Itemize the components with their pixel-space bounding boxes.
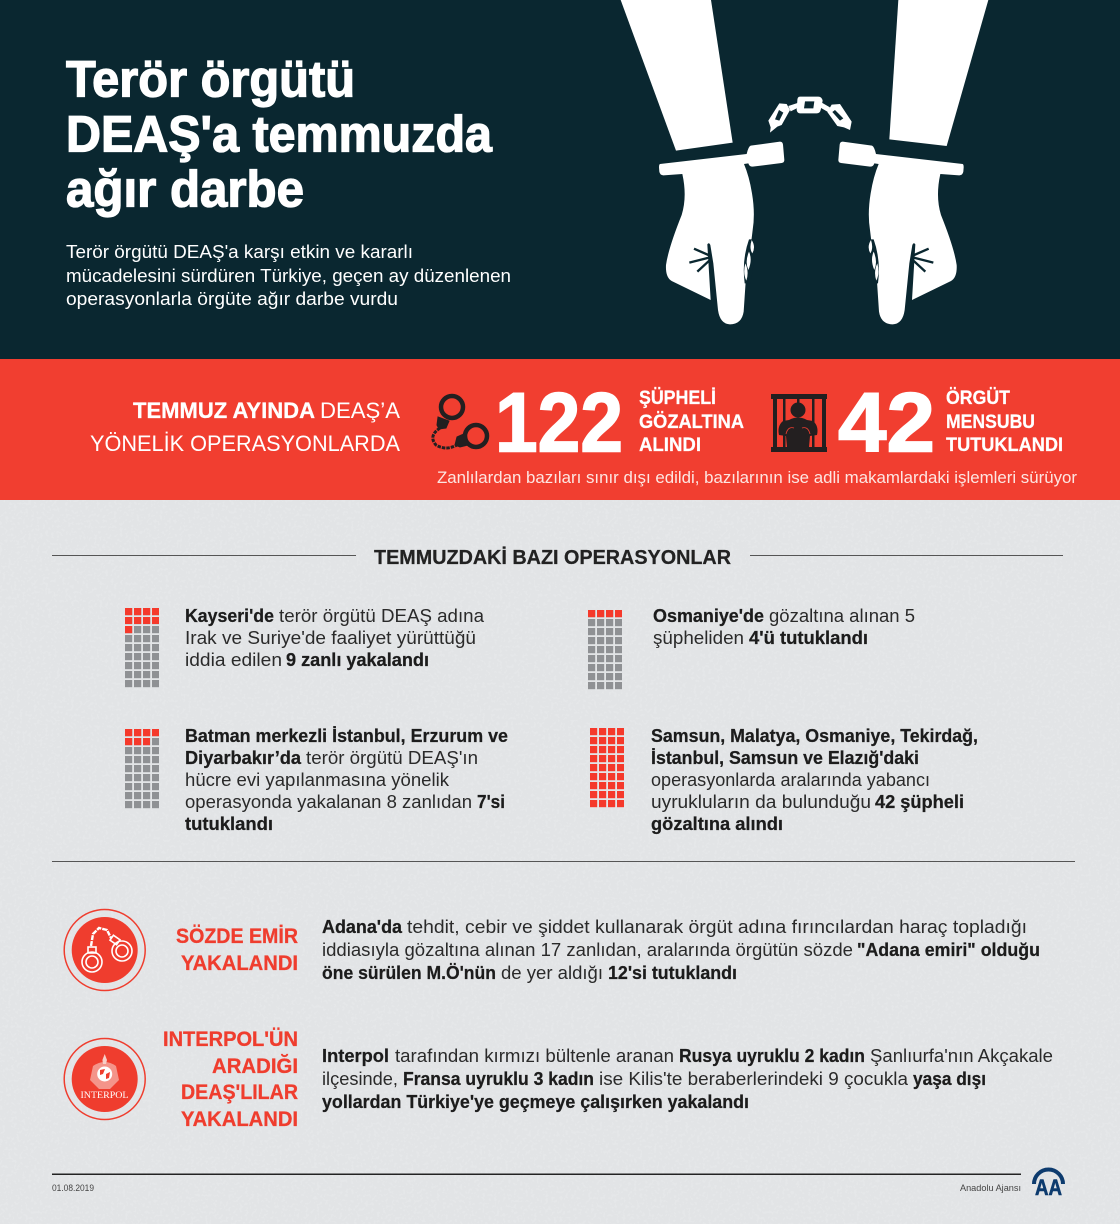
heading: Sözde emir yakalandı (176, 925, 298, 975)
stat: 42: MENSUBU (946, 412, 1035, 433)
text: Adana: iddiasıyla gözaltına alınan 17 zanlıdan, aralarında örgütün sözde (322, 940, 853, 960)
heading: Interpol'ün aradığı: INTERPOL'ÜN (163, 1028, 298, 1051)
logo: Anadolu Ajansı: AA (1035, 1175, 1062, 1200)
text: Osmaniye: Osmaniye'de (653, 606, 764, 626)
grid icon: 7 red of 36 (125, 729, 159, 809)
stats band (0, 359, 1120, 500)
text: Kayseri: terör örgütü DEAŞ adına (279, 606, 485, 626)
story: Sözde emir (64, 910, 1040, 990)
text: Interpol (322, 1046, 1053, 1112)
text: Samsun: İstanbul, Samsun ve Elazığ'daki (651, 748, 919, 768)
text: Batman: Batman merkezli İstanbul, Erzurum ve (185, 726, 508, 746)
text: Interpol: yaşa dışı (913, 1069, 986, 1089)
heading: Interpol'ün aradığı: DEAŞ'LILAR (181, 1081, 298, 1104)
stat: 42: 42 (838, 376, 935, 470)
intro text: operasyonlarla örgüte ağır darbe vurdu (66, 289, 398, 309)
band heading: TEMMUZ AYINDA (133, 398, 315, 423)
stat: 122: ŞÜPHELİ (639, 388, 716, 409)
text: Adana: de yer aldığı (501, 963, 603, 983)
icon: prisoner behind bars (771, 394, 827, 452)
title: DEAŞ'a temmuzda (66, 106, 493, 162)
grid icon: all red (590, 728, 624, 808)
item: Samsun (590, 726, 978, 834)
text: Batman: terör örgütü DEAŞ'ın (306, 748, 478, 768)
text: Kayseri: 9 zanlı yakalandı (286, 650, 429, 670)
band heading (90, 398, 400, 456)
stat: 42 (838, 376, 1063, 470)
text: Adana: öne sürülen M.Ö'nün (322, 963, 496, 983)
grid icon: 9 red of 36 (125, 608, 159, 688)
stat: 122: 122 (495, 376, 623, 470)
text: Interpol: Şanlıurfa'nın Akçakale (870, 1046, 1053, 1066)
heading: Sözde emir yakalandı: YAKALANDI (181, 952, 298, 975)
title (66, 50, 493, 218)
page background (0, 500, 1120, 1224)
grid icon: 4 red of 36 (588, 610, 622, 690)
title: Terör örgütü (66, 50, 355, 108)
intro text (66, 242, 511, 309)
stat: 42: TUTUKLANDI (946, 435, 1063, 456)
text: Batman: tutuklandı (185, 814, 273, 834)
text: Interpol: tarafından kırmızı bültenle aranan (395, 1046, 674, 1066)
text: Osmaniye: gözaltına alınan 5 (769, 606, 915, 626)
text: Osmaniye (653, 606, 915, 648)
band heading: DEAŞ’A (320, 398, 400, 423)
item: Batman (125, 726, 508, 834)
item: Kayseri (125, 606, 485, 688)
heading: Interpol'ün aradığı (163, 1028, 298, 1131)
text: Kayseri: iddia edilen (185, 650, 282, 670)
band heading: YÖNELİK OPERASYONLARDA (90, 431, 400, 456)
text: Interpol: ilçesinde, (322, 1069, 398, 1089)
section heading: TEMMUZDAKİ BAZI OPERASYONLAR (374, 546, 732, 569)
text: Interpol: yollardan Türkiye'ye geçmeye çalışırken yakalandı (322, 1092, 749, 1112)
footer (52, 1170, 1063, 1200)
text: Samsun (651, 726, 978, 834)
text: Batman: operasyonda yakalanan 8 zanlıdan (185, 792, 472, 812)
text: Kayseri (185, 606, 485, 670)
story: Interpol (64, 1028, 1053, 1131)
header panel (0, 0, 1120, 360)
intro text: Terör örgütü DEAŞ'a karşı etkin ve kararlı (66, 242, 413, 262)
text: Adana: "Adana emiri" olduğu (857, 940, 1040, 960)
text: Samsun: 42 şüpheli (875, 792, 964, 812)
date: 01.08.2019 (52, 1183, 94, 1194)
text: Osmaniye: 4'ü tutuklandı (749, 628, 868, 648)
heading: Sözde emir yakalandı: SÖZDE EMİR (176, 925, 298, 948)
text: Adana: tehdit, cebir ve şiddet kullanarak örgüt adına fırıncılardan haraç topladığı (407, 917, 1027, 937)
title: ağır darbe (66, 160, 304, 218)
illustration: cuffed hands with broken chain (621, 0, 988, 324)
intro text: mücadelesini sürdüren Türkiye, geçen ay düzenlenen (66, 266, 511, 286)
text: Batman: Diyarbakır’da (185, 748, 302, 768)
text: Samsun: operasyonlarda aralarında yabancı (651, 770, 930, 790)
text: Interpol: Fransa uyruklu 3 kadın (403, 1069, 594, 1089)
text: Osmaniye: şüpheliden (653, 628, 744, 648)
text: Adana: 12'si tutuklandı (608, 963, 737, 983)
text: Adana: Adana'da (322, 917, 403, 937)
text: Interpol: ise Kilis'te beraberlerindeki 9 çocukla (599, 1069, 909, 1089)
item: Osmaniye (588, 606, 915, 690)
text: Samsun: gözaltına alındı (651, 814, 783, 834)
text: Interpol: Interpol (322, 1046, 389, 1066)
text: Batman: 7'si (477, 792, 505, 812)
stat: 122: GÖZALTINA (639, 412, 744, 433)
icon: handcuffs (433, 396, 487, 448)
stat: 42: ÖRGÜT (946, 388, 1010, 409)
text: Samsun: Samsun, Malatya, Osmaniye, Tekirdağ, (651, 726, 978, 746)
icon: handcuffs in circle (64, 910, 145, 990)
text: Samsun: uyrukluların da bulunduğu (651, 792, 871, 812)
text: Interpol: Rusya uyruklu 2 kadın (679, 1046, 865, 1066)
text: Batman: hücre evi yapılanmasına yönelik (185, 770, 450, 790)
band note: Zanlılardan bazıları sınır dışı edildi, bazılarının ise adli makamlardaki işlemleri sürüyor (437, 469, 1078, 487)
text: Kayseri: Irak ve Suriye'de faaliyet yürüttüğü (185, 628, 476, 648)
text: Kayseri: Kayseri'de (185, 606, 274, 626)
heading: Interpol'ün aradığı: YAKALANDI (181, 1108, 298, 1131)
icon: Interpol emblem in circle: INTERPOL (80, 1090, 128, 1100)
stat: 122: ALINDI (639, 435, 701, 456)
text: Batman (185, 726, 508, 834)
credit: Anadolu Ajansı (960, 1183, 1021, 1194)
stat: 122 (495, 376, 744, 470)
heading: Interpol'ün aradığı: ARADIĞI (212, 1054, 298, 1078)
text: Adana (322, 917, 1040, 983)
icon: Interpol emblem in circle (64, 1038, 145, 1120)
